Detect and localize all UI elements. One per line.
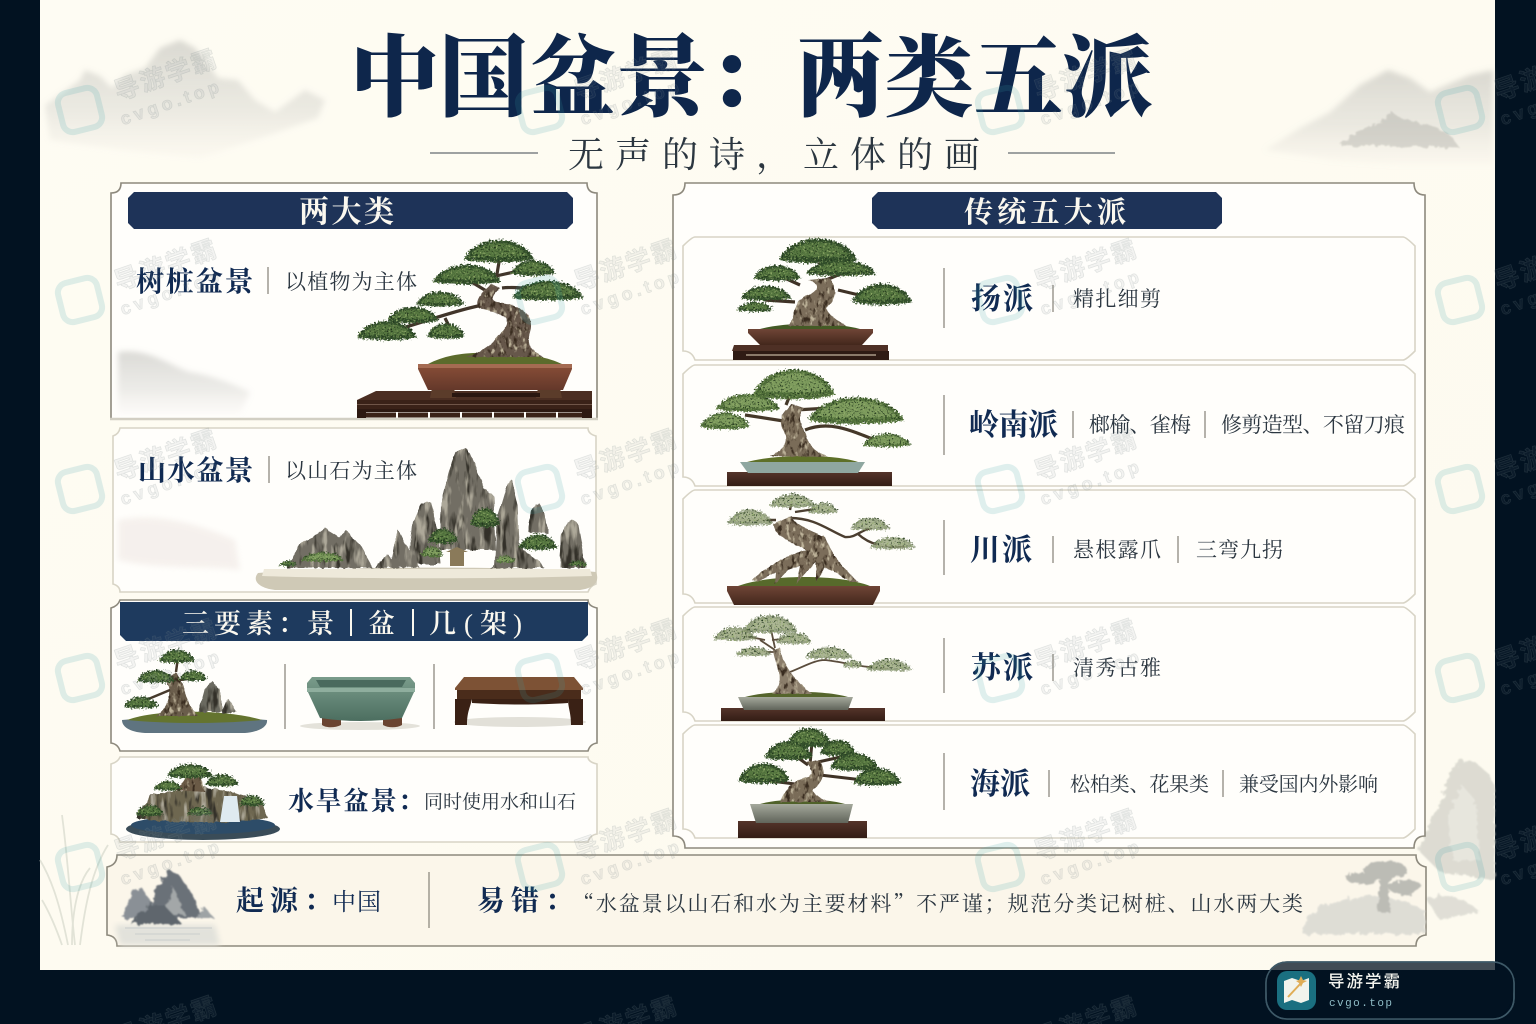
header: five schools: 传统五大派 (964, 190, 1126, 231)
illustration: pine bonsai on stand (357, 240, 592, 418)
watermarks: cvgo.top (578, 645, 685, 699)
watermarks: 导游学霸 (571, 425, 682, 486)
watermarks: cvgo.top (578, 265, 685, 319)
watermarks: 导游学霸 (571, 615, 682, 676)
background landscape: left reeds (40, 815, 108, 945)
panel: water-land bonsai (111, 757, 597, 842)
watermarks: cvgo.top (578, 835, 685, 889)
watermarks: cvgo.top (1038, 455, 1145, 509)
illustration: Su school tree (713, 615, 912, 721)
label: landscape bonsai: 山水盆景 (138, 449, 254, 489)
label: stump bonsai: 树桩盆景 (136, 260, 254, 300)
text: Hai school: 兼受国内外影响 (1239, 768, 1378, 797)
illustration: Lingnan school tree (700, 370, 911, 486)
text: origin: 中国 (332, 882, 381, 917)
panel: five schools (673, 183, 1425, 848)
header: three elements: 景 (307, 602, 334, 641)
text: Su school: 苏派 (971, 643, 1033, 687)
row: Lingnan school (683, 365, 1415, 486)
watermarks: cvgo.top (118, 75, 225, 129)
illustration: lower right ink pine (1303, 861, 1425, 934)
illustration: rock landscape on tray (256, 449, 597, 590)
text: Yang school (971, 274, 1161, 318)
text: Yang school: 精扎细剪 (1073, 283, 1161, 313)
header: three elements: 架 (480, 602, 507, 641)
illustration: water-land bonsai (126, 764, 280, 840)
watermarks: 导游学霸 (111, 235, 222, 296)
text: origin (236, 879, 381, 919)
illustration: Hai school tree (738, 728, 901, 838)
watermarks: 导游学霸 (571, 45, 682, 106)
watermarks: cvgo.top (1038, 645, 1145, 699)
watermarks: cvgo.top (1038, 75, 1145, 129)
text: Chuan school (970, 525, 1283, 569)
watermarks: cvgo.top (578, 455, 685, 509)
label: water-land bonsai (288, 781, 576, 818)
text: Hai school: 松柏类、花果类 (1070, 768, 1209, 797)
text: Chuan school: 川派 (970, 525, 1032, 569)
logo badge: cvgo.top (1329, 998, 1392, 1010)
text: Lingnan school: 榔榆、雀梅 (1089, 409, 1191, 439)
panel: three elements (111, 600, 597, 751)
text: Su school (971, 643, 1161, 687)
text: Chuan school: 三弯九拐 (1196, 534, 1283, 564)
watermarks: cvgo.top (118, 645, 225, 699)
watermarks: 导游学霸 (571, 235, 682, 296)
mist decoration in card (118, 351, 250, 414)
watermarks: cvgo.top (1038, 835, 1145, 889)
illustration: Yang school tree (732, 239, 912, 360)
logo badge (1266, 962, 1514, 1019)
watermarks: 导游学霸 (1031, 45, 1142, 106)
label: water-land bonsai: 水旱盆景： (288, 781, 424, 818)
watermarks: cvgo.top (118, 265, 225, 319)
header: three elements: ) (513, 609, 522, 639)
illustration: Chuan school tree (727, 494, 916, 605)
illustration: pot (pen) (300, 677, 420, 730)
watermarks: 导游学霸 (571, 805, 682, 866)
text: common mistake: “水盆景以山石和水为主要材料”不严谨；规范分类记树桩、山水两大类 (573, 888, 1303, 918)
subtitle: 无声的诗，立体的画 (568, 127, 980, 178)
illustration: stand (ji) (454, 677, 586, 727)
illustration: ink mountain (115, 870, 220, 945)
header: three elements: 几 (429, 602, 456, 641)
text: Yang school: 扬派 (971, 274, 1033, 318)
watermarks: 导游学霸 (111, 425, 222, 486)
header: two categories: 两大类 (299, 187, 394, 231)
row: Yang school (683, 237, 1415, 360)
text: Hai school (970, 759, 1378, 803)
watermarks: 导游学霸 (1031, 235, 1142, 296)
header: two categories (128, 187, 573, 231)
watermarks: cvgo.top (1038, 265, 1145, 319)
panel: origin and common mistake (107, 855, 1426, 946)
header: three elements: 盆 (368, 602, 395, 641)
icon: map (1277, 971, 1316, 1010)
text: common mistake (477, 879, 1303, 919)
logo badge: 导游学霸 (1328, 971, 1400, 991)
label: stump bonsai (136, 260, 417, 300)
label: water-land bonsai: 同时使用水和山石 (424, 787, 576, 814)
text: Lingnan school: 岭南派 (969, 400, 1058, 444)
text: common mistake: 易错： (477, 879, 573, 919)
text: origin: 起源： (236, 879, 332, 919)
watermarks: cvgo.top (118, 455, 225, 509)
label: landscape bonsai: 以山石为主体 (285, 455, 417, 485)
watermarks: 导游学霸 (111, 805, 222, 866)
text: Lingnan school: 修剪造型、不留刀痕 (1221, 409, 1405, 439)
illustration: scene (jing) (122, 650, 267, 733)
watermarks: 导游学霸 (1031, 425, 1142, 486)
watermarks: 导游学霸 (1031, 615, 1142, 676)
row: Hai school (683, 725, 1415, 838)
text: Su school: 清秀古雅 (1073, 652, 1161, 682)
text: Chuan school: 悬根露爪 (1073, 534, 1161, 564)
text: Lingnan school (969, 400, 1405, 444)
panel: landscape bonsai (113, 428, 597, 592)
label: stump bonsai: 以植物为主体 (285, 266, 417, 296)
panel: two categories (110, 183, 598, 419)
watermarks: cvgo.top (118, 835, 225, 889)
header: three elements: 三要素： (182, 602, 305, 641)
header: three elements: ( (464, 609, 473, 639)
watermarks: cvgo.top (578, 75, 685, 129)
row: Chuan school (683, 490, 1415, 605)
label: landscape bonsai (138, 449, 417, 489)
watermarks: 导游学霸 (111, 615, 222, 676)
header: five schools (872, 190, 1222, 231)
background landscape: lower right peak (1418, 760, 1495, 920)
watermarks: 导游学霸 (1031, 805, 1142, 866)
background landscape: top left mountains (45, 40, 325, 158)
watermarks: 导游学霸 (111, 45, 222, 106)
row: Su school (683, 607, 1415, 721)
text: Hai school: 海派 (970, 759, 1030, 803)
background landscape: top right mountains (1265, 70, 1493, 165)
header: three elements (120, 602, 588, 641)
title: 中国盆景：两类五派 (350, 8, 1152, 135)
